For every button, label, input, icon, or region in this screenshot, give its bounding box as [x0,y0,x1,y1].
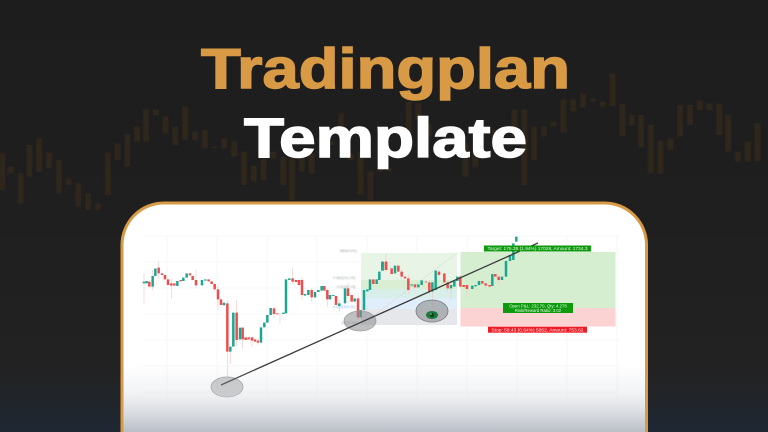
label: open profit and loss: Risk/Reward Ratio: 3.02 [515,308,562,313]
icon: eye [426,311,438,319]
rising candles [144,262,383,352]
card body [122,203,646,432]
ellipse marker: higher low [344,311,376,331]
candle wicks [386,253,499,308]
title: Template: Template [244,106,527,169]
rising candles [382,237,516,292]
label: target: Target: 176.38 (1.94%) 17028, Amount: 1734.3 [488,246,588,251]
candlestick chart right [382,237,516,308]
label: stop [488,327,587,333]
label: open profit and loss [503,303,573,313]
card bottom fade [124,365,645,432]
trend line [221,243,538,385]
fibonacci retracement zones [361,253,457,325]
falling candles [386,262,499,292]
candle wicks [144,262,358,377]
chart grid [143,236,620,400]
label: stop: Stop: 58.43 (0.64%) 5862, Amount: 753.62 [492,327,584,332]
fibonacci labels: 889(6.0%) [340,249,357,253]
ellipse marker: eye [416,300,448,322]
label: open profit and loss: Open P&L: 232.70, Qty: 4.278 [509,304,567,308]
label: target [484,246,591,252]
title: Tradingplan: Tradingplan [201,37,570,101]
fibonacci labels: 100(0.0%) [341,321,358,325]
falling candles [149,262,386,352]
fibonacci labels: 0.382(211.25) [333,276,355,280]
fibonacci labels: 0.5(262.79) [337,285,355,289]
ellipse marker: lower low [211,377,243,397]
background candlestick pattern [2,73,758,210]
stop loss zone [460,308,616,326]
fibonacci labels [333,249,358,325]
candlestick chart left [144,262,386,377]
panel: chart card [122,203,646,432]
target profit zone [460,252,616,308]
fibonacci labels: 0.618(314.32) [333,305,355,309]
